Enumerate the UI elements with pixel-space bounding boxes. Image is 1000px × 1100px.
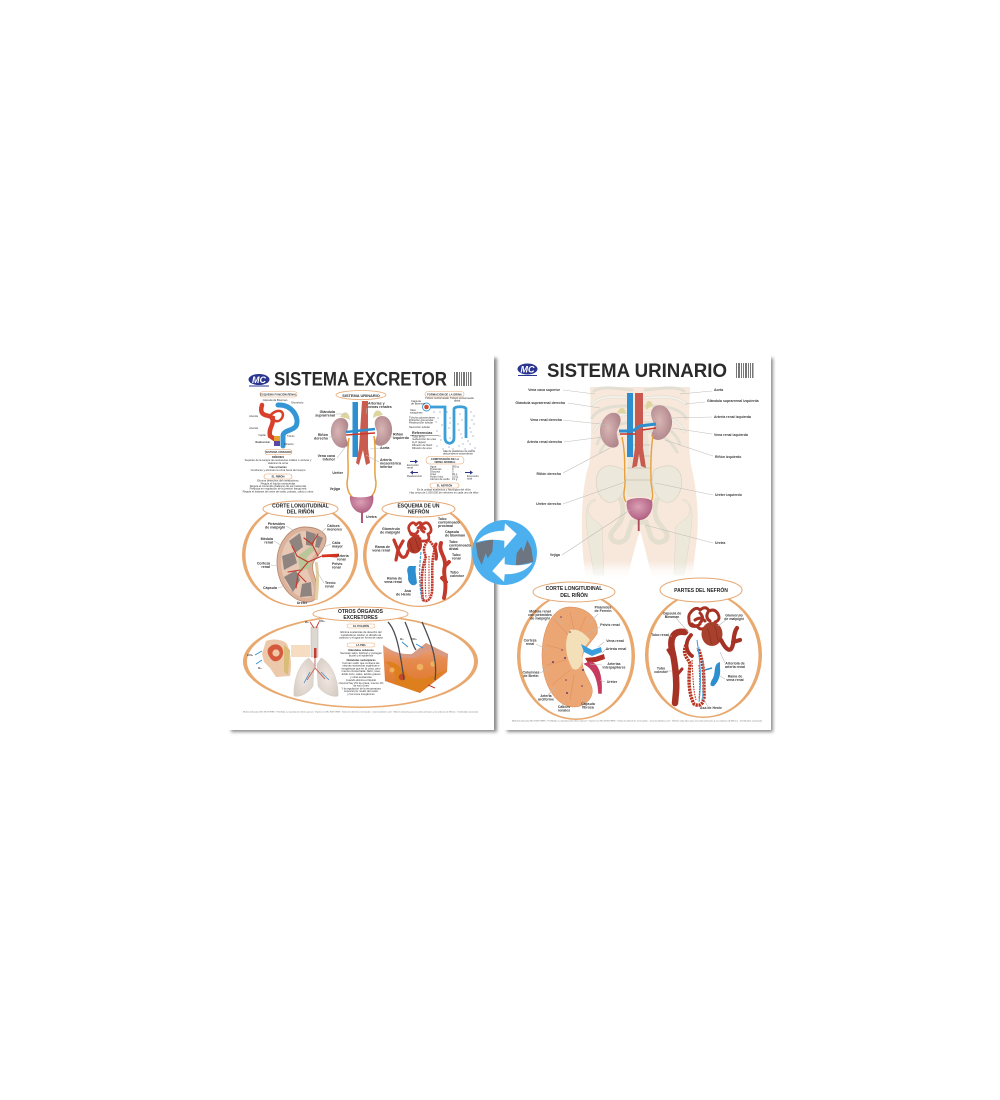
- panel: esquema funcion renal: Filtración: [284, 443, 294, 446]
- panel: corte longitudinal del riñon: fibrosa: [582, 706, 594, 710]
- barcode: [454, 372, 472, 386]
- panel: formacion de la orina: Tubo de la: [412, 434, 425, 438]
- panel: partes del nefron: de malpighi: [724, 617, 744, 621]
- panel: composicion de la orina: Excreción: [407, 463, 419, 467]
- panel: corte longitudinal del riñon: interpapilares: [603, 666, 626, 670]
- labels: anatomy left side: Uréter derecho: [536, 502, 561, 506]
- panel: partes del nefron: colector: [654, 670, 668, 674]
- panel: corte longitudinal del riñon: renal: [264, 540, 273, 544]
- barcode: [736, 363, 754, 378]
- panel: composicion de la orina: Hay cerca de 1.000.000 de nefrones en cada uno de ellos: [409, 490, 479, 494]
- panel: esquema funcion renal: Túbulo: [287, 435, 295, 438]
- text block: el pulmon y la piel: y los iones inorgánicos: [347, 692, 375, 696]
- text block: el pulmon y la piel: la piel y el epidermis: [349, 654, 374, 658]
- text block: sistema urinario: [243, 450, 314, 493]
- panel: poster Sistema Excretor: [228, 354, 494, 730]
- text block: sistema urinario: elaboran la orina: [268, 461, 289, 465]
- panel: esquema de un nefron: NEFRÓN: [408, 508, 429, 516]
- panel: corte longitudinal del riñon: menores: [327, 528, 342, 532]
- labels: anatomy right side: Riñón izquierdo: [715, 455, 741, 459]
- labels: anatomy left side: Vejiga: [550, 553, 560, 557]
- illustration: lungs and trachea: [294, 619, 338, 696]
- panel: formacion de la orina: descendente: [443, 452, 459, 456]
- panel: esquema de un nefron: vena renal: [372, 548, 390, 552]
- panel: sistema urinario diagram: inferior: [380, 465, 393, 469]
- panel: esquema funcion renal: Capilar: [258, 434, 266, 437]
- illustration: lungs and trachea: O₂: [305, 620, 309, 624]
- panel: sistema urinario diagram: Arteria: [380, 458, 393, 462]
- panel: partes del nefron: Tubo: [657, 666, 665, 670]
- panel: esquema de un nefron: renal: [452, 556, 461, 560]
- labels: anatomy right side: Uréter izquierdo: [715, 493, 742, 497]
- title: SISTEMA EXCRETOR: [274, 368, 447, 390]
- panel: sistema urinario diagram: Aorta: [380, 446, 390, 450]
- illustration: skin section: CO₂: [411, 637, 418, 641]
- text block: el pulmon y la piel: Forman sudor que contiene las: [342, 661, 380, 665]
- panel: sistema urinario diagram: [314, 390, 410, 523]
- text block: el pulmon y la piel: Secretan sebo, lubrican y protegen: [340, 651, 382, 655]
- footer note: Material educativo MC EDITORES · Prohibida su reproducción total o parcial · Impreso en MC EDITORES · Todos los derechos reservados · www.mceditores.com · Edición educativa para escuelas primarias y secundarias de México · Distribuidor autorizado: [243, 710, 479, 714]
- text block: sistema urinario: Conducen y eliminan la orina fuera del cuerpo: [251, 468, 306, 472]
- panel: esquema de un nefron: contorneado: [449, 544, 472, 548]
- text block: sistema urinario: Regula el contenido (balance) de sal (natremia): [250, 484, 306, 488]
- text block: el pulmon y la piel: Glándulas sudoríparas: [346, 658, 376, 662]
- panel: corte longitudinal del riñon: Pirámides: [595, 606, 611, 610]
- panel: sistema urinario diagram: izquierdo: [393, 436, 410, 440]
- panel: corte longitudinal del riñon: renal: [337, 558, 346, 562]
- panel: corte longitudinal del riñon: Corteza: [257, 562, 271, 566]
- icon: publisher logo: [518, 364, 538, 376]
- panel: sistema urinario diagram: Riñón: [318, 433, 328, 437]
- panel: formacion de la orina: H₂O (agua): [412, 440, 426, 444]
- panel: formacion de la orina: Asa de Henle: [443, 449, 460, 453]
- illustration: torso with urinary system: [575, 387, 705, 580]
- panel: partes del nefron: PARTES DEL NEFRÓN: [674, 586, 728, 594]
- panel: esquema de un nefron: Rama de: [387, 576, 402, 580]
- text block: el pulmon y la piel: inorgánicas que en la orina, pero: [341, 666, 381, 670]
- panel: corte longitudinal del riñon: Pelvis: [332, 562, 342, 566]
- panel: partes del nefron: vena renal: [726, 678, 744, 682]
- panel: formacion de la orina: distal: [454, 398, 461, 402]
- panel: composicion de la orina: Cloruro de sodio: [430, 477, 450, 481]
- panel: corte longitudinal del riñon: de malpighi: [530, 616, 550, 620]
- panel: corte longitudinal del riñon: Pelvis renal: [600, 623, 620, 627]
- panel: composicion de la orina: Excreción: [467, 474, 479, 478]
- panel: corte longitudinal del riñon: Pirámides: [268, 522, 285, 526]
- icon: blue circular swap arrows: [472, 520, 537, 585]
- panel: composicion de la orina: renal: [407, 466, 413, 470]
- panel: composicion de la orina: Reabsorción: [407, 474, 423, 478]
- panel: sistema urinario diagram: Riñón: [393, 432, 403, 436]
- panel: corte longitudinal del riñon: CORTE LONGITUDINAL: [272, 504, 329, 510]
- labels: anatomy right side: Arteria renal izquierda: [714, 415, 751, 419]
- text block: el pulmon y la piel: Cuando elimina el líquido: [346, 678, 377, 682]
- panel: corte longitudinal del riñon: DEL RIÑÓN: [560, 591, 588, 599]
- panel: partes del nefron: Arteriola de: [725, 662, 745, 666]
- illustration: head section: O₂: [258, 666, 262, 670]
- panel: corte longitudinal del riñon: renal: [332, 566, 341, 570]
- labels: anatomy right side: Uretra: [715, 541, 725, 545]
- panel: composicion de la orina: Ácido úrico: [430, 474, 444, 478]
- footer note: Material educativo MC EDITORES · Prohibida su reproducción total o parcial · Impreso en MC EDITORES · Todos los derechos reservados · www.mceditores.com · Edición educativa para escuelas primarias y secundarias de México · Distribuidor autorizado: [512, 720, 763, 722]
- panel: esquema funcion renal: Cápsula de Bowman: [263, 398, 288, 402]
- panel: formacion de la orina: Difusión de NaCl: [412, 443, 433, 447]
- panel: composicion de la orina: Urea: [430, 472, 436, 476]
- panel: sistema urinario diagram: Uretra: [366, 515, 378, 519]
- icon: publisher logo: [248, 374, 270, 386]
- panel: corte longitudinal del riñon: de Ferrein: [595, 609, 611, 613]
- panel: formacion de la orina: Cápsula: [411, 399, 421, 403]
- panel: esquema de un nefron: Asa: [404, 589, 412, 593]
- text block: sistema urinario: Vías urinarias: [269, 465, 287, 469]
- text block: sistema urinario: RIÑONES: [272, 454, 284, 459]
- panel: corte longitudinal del riñon: renales: [558, 708, 570, 712]
- panel: esquema de un nefron: de malpighi: [380, 530, 400, 534]
- labels: anatomy right side: Aorta: [714, 388, 723, 392]
- text block: el pulmon y la piel: mismas sustancias orgánicas e: [342, 664, 380, 668]
- panel: sistema urinario diagram: Uréter: [332, 471, 344, 475]
- panel: composicion de la orina: total: [467, 476, 472, 480]
- panel: esquema funcion renal: Arteriola: [249, 427, 259, 430]
- panel: composicion de la orina: 950 g: [452, 464, 459, 468]
- panel: corte longitudinal del riñon: Arteria renal: [606, 647, 626, 651]
- panel: composicion de la orina: EL NEFRÓN: [437, 482, 452, 488]
- panel: corte longitudinal del riñon: [517, 582, 635, 720]
- panel: esquema de un nefron: de Henle: [396, 592, 411, 596]
- panel: corte longitudinal del riñon: Corteza: [524, 638, 536, 642]
- panel: esquema de un nefron: Glomérulo: [382, 527, 401, 531]
- labels: anatomy left side: Arteria renal derecha: [527, 440, 562, 444]
- labels: anatomy left side: Vena cava superior: [528, 388, 561, 392]
- panel: partes del nefron: Bowman: [665, 615, 679, 619]
- panel: sistema urinario diagram: SISTEMA URINARIO: [342, 393, 380, 398]
- panel: formacion de la orina: Secreción tubular: [409, 425, 430, 429]
- illustration: head section: [247, 640, 310, 677]
- panel: partes del nefron: Rama de: [728, 674, 742, 678]
- panel: sistema urinario diagram: Glándula: [320, 410, 336, 414]
- text block: sistema urinario: Elimina desechos del metabolismo: [257, 478, 299, 482]
- text block: el pulmon y la piel: menos concentrada: NaCl, urea,: [342, 669, 381, 673]
- panel: esquema de un nefron: Tubo: [452, 553, 461, 557]
- panel: sistema urinario diagram: suprarrenal: [315, 414, 335, 418]
- panel: sistema urinario diagram: mesentérica: [380, 462, 402, 466]
- text block: el pulmon y la piel: corporal por medio del sudor: [344, 689, 378, 693]
- panel: composicion de la orina: Es la unidad anatómica y fisiológica del riñón: [417, 488, 471, 492]
- panel: corte longitudinal del riñon: renal: [325, 584, 334, 588]
- icon: publisher logo: MC: [252, 375, 266, 385]
- labels: anatomy left side: Vena renal derecha: [530, 418, 562, 422]
- panel: esquema de un nefron: Tubo: [438, 517, 447, 521]
- panel: corte longitudinal del riñon: con pirámides: [528, 613, 552, 617]
- panel: formacion de la orina: de Bowman: [411, 402, 426, 406]
- panel: corte longitudinal del riñon: de Bertín: [523, 674, 539, 678]
- panel: poster Sistema Urinario: [504, 354, 771, 730]
- panel: corte longitudinal del riñon: renal: [261, 565, 270, 569]
- title: SISTEMA URINARIO: [547, 360, 727, 382]
- panel: corte longitudinal del riñon: Cálices: [558, 705, 570, 709]
- panel: sistema urinario diagram: inferior: [323, 458, 336, 462]
- panel: composicion de la orina: 0: [452, 467, 454, 471]
- panel: esquema funcion renal: Glomérulo: [291, 400, 304, 404]
- panel: corte longitudinal del riñon: de malpighi: [265, 526, 285, 530]
- panel: otros organos excretores: OTROS ÓRGANOS: [338, 607, 384, 615]
- panel: corte longitudinal del riñon: Arterias: [607, 662, 621, 666]
- panel: corte longitudinal del riñon: Arteria: [337, 554, 350, 558]
- panel: partes del nefron: Asa de Henle: [700, 706, 722, 710]
- panel: corte longitudinal del riñon: Uréter: [297, 601, 308, 605]
- panel: otros organos excretores: [243, 607, 478, 708]
- text block: sistema urinario: EL RIÑÓN: [272, 474, 284, 478]
- panel: formacion de la orina: Túbulo contorneado: [425, 396, 449, 400]
- panel: esquema de un nefron: Cápsula: [445, 530, 460, 534]
- panel: formacion de la orina: Asa de Henle: [459, 449, 476, 453]
- panel: composicion de la orina: [407, 456, 479, 494]
- panel: corte longitudinal del riñon: Cápsula: [581, 702, 595, 706]
- panel: formacion de la orina: sanguíneo: [410, 410, 423, 414]
- panel: composicion de la orina: Glucosa: [430, 470, 440, 474]
- panel: corte longitudinal del riñon: Médula: [261, 537, 274, 541]
- panel: esquema de un nefron: Rama de: [375, 545, 390, 549]
- panel: composicion de la orina: 0: [452, 470, 454, 474]
- text block: sistema urinario: Separan de la sangre las sustancias inútiles o nocivas y: [245, 458, 312, 462]
- text block: el pulmon y la piel: LA PIEL: [356, 643, 366, 647]
- panel: corte longitudinal del riñon: Cálices: [327, 524, 340, 528]
- text block: sistema urinario: Regula el líquido extracelular: [261, 481, 295, 485]
- icon: publisher logo: MC: [520, 364, 535, 374]
- panel: corte longitudinal del riñon: Uréter: [607, 680, 618, 684]
- panel: esquema de un nefron: proximal: [438, 524, 453, 528]
- panel: partes del nefron: Cápsula de: [663, 612, 681, 616]
- panel: composicion de la orina: 30 g: [452, 472, 458, 476]
- panel: formacion de la orina: Túbulos glomerulares: [409, 416, 435, 420]
- text block: el pulmon y la piel: ácido úrico, sales, ácidos grasos: [342, 672, 381, 676]
- panel: partes del nefron: Tubo renal: [651, 633, 669, 637]
- panel: corte longitudinal del riñon: Arteria: [540, 694, 552, 698]
- panel: formacion de la orina: FORMACIÓN DE LA ORINA: [427, 392, 462, 396]
- text block: el pulmon y la piel: corporal hay 2% de grasa, menos 1%: [339, 681, 384, 685]
- panel: formacion de la orina: Filtración glomerular: [409, 418, 433, 422]
- panel: corte longitudinal del riñon: Columnas: [523, 670, 540, 674]
- panel: esquema de un nefron: distal: [449, 547, 458, 551]
- panel: partes del nefron: [645, 578, 762, 718]
- panel: esquema de un nefron: vena renal: [384, 580, 402, 584]
- panel: esquema de un nefron: [363, 501, 475, 607]
- labels: anatomy left side: Riñón derecho: [536, 472, 561, 476]
- panel: sistema urinario diagram: derecho: [314, 436, 329, 440]
- panel: esquema de un nefron: contorneado: [438, 520, 461, 524]
- illustration: skin section: [383, 622, 448, 693]
- poster shadows: [231, 358, 773, 732]
- panel: esquema de un nefron: ESQUEMA DE UN: [397, 504, 440, 510]
- panel: corte longitudinal del riñon: CORTE LONGITUDINAL: [546, 586, 602, 592]
- illustration: head section: CO₂: [247, 653, 254, 657]
- panel: composicion de la orina: Agua: [430, 464, 437, 468]
- text block: el pulmon y la piel: EL PULMÓN: [353, 623, 369, 628]
- panel: esquema funcion renal: [249, 392, 304, 446]
- labels: anatomy right side: Vena renal izquierda: [714, 433, 748, 437]
- text block: el pulmon y la piel: Elimina sustancias de desecho del: [340, 630, 382, 634]
- leader lines: [562, 390, 713, 555]
- labels: anatomy right side: [707, 388, 759, 545]
- text block: el pulmon y la piel: Y la regulación de la temperatura: [341, 686, 381, 690]
- panel: corte longitudinal del riñon: renal: [526, 642, 534, 646]
- panel: corte longitudinal del riñon: Vena renal: [606, 639, 624, 643]
- labels: anatomy left side: Glándula suprarrenal derecha: [515, 401, 565, 405]
- panel: esquema de un nefron: colector: [450, 574, 465, 578]
- panel: esquema de un nefron: Tubo: [449, 540, 458, 544]
- panel: otros organos excretores: EXCRETORES: [343, 615, 378, 621]
- panel: formacion de la orina: Difusión de urea: [412, 446, 432, 450]
- panel: esquema de un nefron: Tubo: [450, 570, 459, 574]
- panel: composicion de la orina: 15 g: [452, 477, 458, 481]
- panel: corte longitudinal del riñon: DEL RIÑÓN: [287, 508, 315, 516]
- panel: corte longitudinal del riñon: mayor: [332, 544, 343, 548]
- panel: sistema urinario diagram: Vena cava: [318, 454, 336, 458]
- panel: partes del nefron: Glomérulo: [725, 614, 743, 618]
- panel: formacion de la orina: reabsorción de urea: [412, 437, 436, 441]
- panel: corte longitudinal del riñon: arciforme: [538, 698, 554, 702]
- panel: formacion de la orina: Reabsorción tubular: [409, 420, 433, 424]
- illustration: skin section: O₂: [400, 637, 404, 641]
- text block: el pulmon y la piel: metabolismo celular: el dióxido de: [341, 633, 382, 637]
- text block: el pulmon y la piel: Glándulas sebáceas: [348, 648, 374, 652]
- panel: corte longitudinal del riñon: Cápsula: [263, 586, 278, 590]
- panel: formacion de la orina: Referencias: [412, 431, 432, 435]
- panel: corte longitudinal del riñon: [242, 501, 358, 607]
- panel: sistema urinario diagram: Arterias y: [368, 402, 385, 406]
- labels: anatomy right side: Glándula suprarrenal izquierda: [707, 399, 759, 403]
- panel: sistema urinario diagram: venas renales: [368, 405, 392, 409]
- panel: composicion de la orina: COMPOSICIÓN DE LA: [431, 456, 459, 461]
- panel: esquema funcion renal: Reabsorción: [256, 441, 271, 444]
- panel: esquema funcion renal: Arteriola: [249, 415, 259, 418]
- panel: composicion de la orina: Proteínas: [430, 467, 442, 471]
- text block: sistema urinario: Participa en regulación de la presión sanguínea: [250, 487, 307, 491]
- panel: formacion de la orina: [409, 392, 476, 456]
- text block: el pulmon y la piel: carbono y el agua en forma de vapor: [339, 636, 383, 640]
- text block: sistema urinario: Regula el balance de iones de sodio, potasio, calcio y otros: [243, 489, 314, 493]
- text block: el pulmon y la piel: de sal y urea: [353, 684, 369, 688]
- panel: composicion de la orina: ORINA NORMAL: [434, 460, 456, 464]
- panel: esquema funcion renal: ESQUEMA FUNCIÓN RENAL: [260, 392, 297, 396]
- illustration: lungs and trachea: CO₂: [319, 619, 326, 623]
- panel: formacion de la orina: Vaso: [410, 408, 416, 412]
- text block: el pulmon y la piel: y otras sustancias: [350, 675, 372, 679]
- labels: anatomy left side: [515, 388, 565, 557]
- panel: formacion de la orina: Túbulo contorneado: [450, 396, 474, 400]
- panel: corte longitudinal del riñon: Cáliz: [332, 541, 341, 545]
- panel: formacion de la orina: ascendente: [459, 452, 473, 456]
- panel: composicion de la orina: 0,5 g: [452, 474, 458, 478]
- panel: corte longitudinal del riñon: Médula renal: [529, 610, 551, 614]
- text block: sistema urinario: SISTEMA URINARIO: [266, 450, 291, 454]
- panel: sistema urinario diagram: Vejiga: [330, 487, 341, 491]
- panel: partes del nefron: arteria renal: [725, 665, 745, 669]
- panel: esquema de un nefron: de Bowman: [445, 534, 465, 538]
- text block: el pulmon y la piel: [339, 623, 384, 696]
- panel: corte longitudinal del riñon: Tercio: [325, 581, 336, 585]
